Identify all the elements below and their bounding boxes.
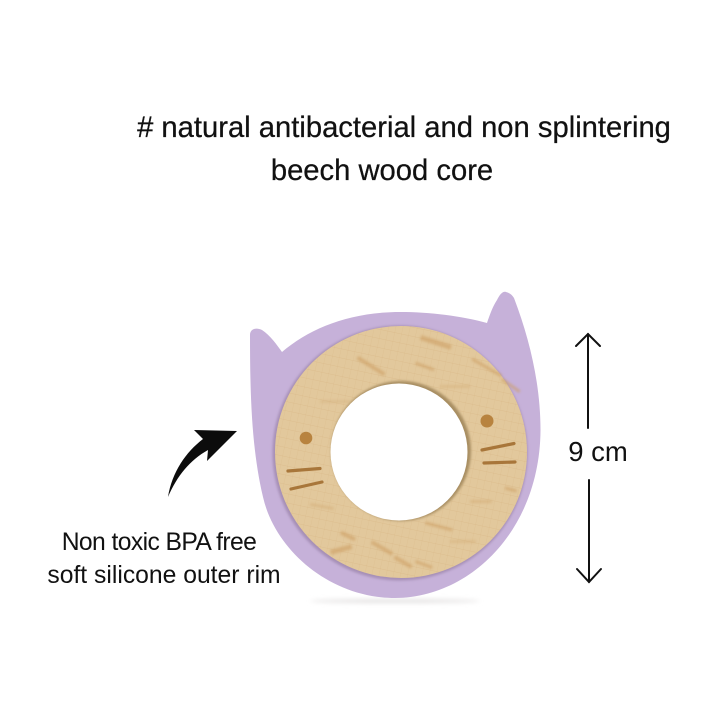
wood shadow on silicone bbox=[272, 326, 528, 580]
label: 9 cm: 9 cm bbox=[568, 436, 628, 467]
centre hole bbox=[330, 384, 468, 520]
silicone outer rim bbox=[250, 292, 540, 598]
arrow: height dimension bbox=[576, 334, 601, 582]
caption: silicone rim: soft silicone outer rim bbox=[47, 562, 281, 589]
arrow: curved pointing to rim bbox=[168, 430, 237, 497]
wooden ring bbox=[275, 326, 527, 578]
teether: cat shaped toy bbox=[250, 292, 540, 603]
caption: non toxic: Non toxic BPA free bbox=[62, 529, 256, 556]
cat face: right eye bbox=[480, 414, 494, 428]
cat face: left eye bbox=[300, 432, 312, 444]
heading: beech wood core: beech wood core bbox=[271, 155, 493, 187]
inner bevel of hole bbox=[331, 381, 471, 521]
wood grain bbox=[310, 335, 521, 569]
heading: natural antibacterial: # natural antibacterial and non splintering bbox=[137, 112, 671, 144]
ground shadow bbox=[310, 599, 480, 603]
cat face: whiskers bbox=[288, 444, 515, 489]
